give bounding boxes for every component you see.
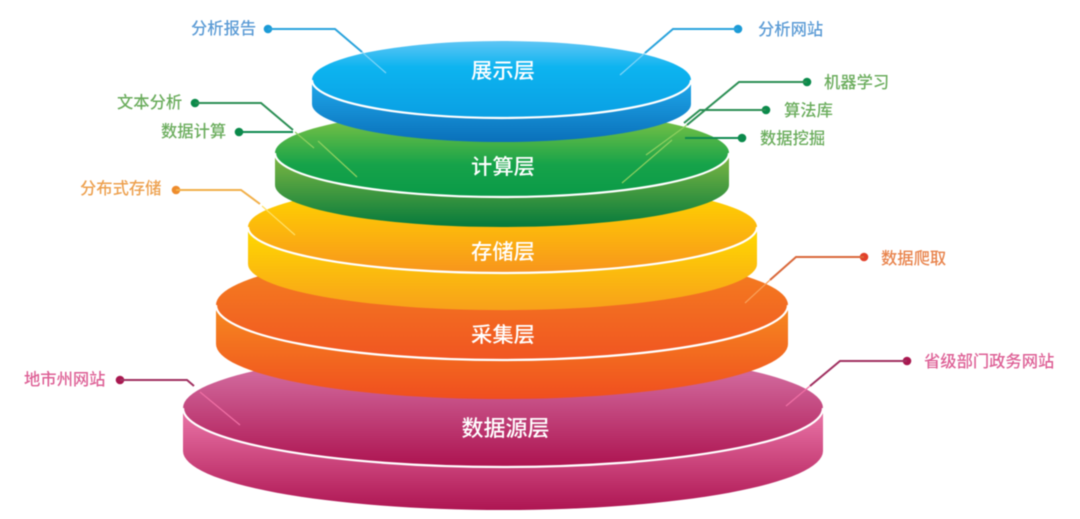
layer disc: 展示层: 展示层 bbox=[471, 59, 535, 83]
callout: 数据计算 bbox=[161, 122, 357, 177]
layer disc: 数据源层 bbox=[183, 349, 823, 510]
layer disc: 采集层: 采集层 bbox=[471, 323, 535, 347]
callout: 分布式存储 bbox=[80, 180, 295, 235]
layer disc: 采集层 bbox=[216, 250, 788, 399]
callout: 省级部门政务网站 bbox=[786, 352, 1054, 406]
layer disc: 存储层: 存储层 bbox=[471, 240, 535, 264]
layer disc: 存储层 bbox=[248, 181, 757, 310]
callout: 数据计算: 数据计算 bbox=[161, 122, 226, 141]
callout: 分析网站: 分析网站 bbox=[758, 21, 823, 39]
layer disc: 数据源层: 数据源层 bbox=[461, 416, 550, 441]
callout: 数据爬取 bbox=[745, 250, 946, 303]
callout: 分析报告: 分析报告 bbox=[191, 20, 256, 38]
layer disc: 展示层 bbox=[312, 41, 691, 142]
callout: 数据挖掘 bbox=[622, 129, 825, 183]
callout: 数据爬取: 数据爬取 bbox=[881, 250, 946, 268]
callout: 算法库 bbox=[684, 101, 833, 123]
callout: 地市州网站 bbox=[24, 370, 240, 425]
callout: 分析网站 bbox=[620, 21, 823, 75]
callout: 分析报告 bbox=[191, 20, 386, 73]
callout: 分布式存储: 分布式存储 bbox=[80, 180, 161, 198]
callout: 数据挖掘: 数据挖掘 bbox=[760, 129, 825, 148]
layer disc: 计算层: 计算层 bbox=[471, 155, 535, 179]
callout: 机器学习 bbox=[646, 73, 889, 155]
callout: 地市州网站: 地市州网站 bbox=[24, 370, 105, 389]
callout: 省级部门政务网站: 省级部门政务网站 bbox=[924, 352, 1054, 371]
callout: 算法库: 算法库 bbox=[784, 101, 833, 120]
layer disc: 计算层 bbox=[275, 109, 729, 227]
callout: 文本分析: 文本分析 bbox=[117, 93, 182, 112]
callout: 文本分析 bbox=[117, 93, 314, 148]
callout: 机器学习: 机器学习 bbox=[824, 73, 889, 92]
